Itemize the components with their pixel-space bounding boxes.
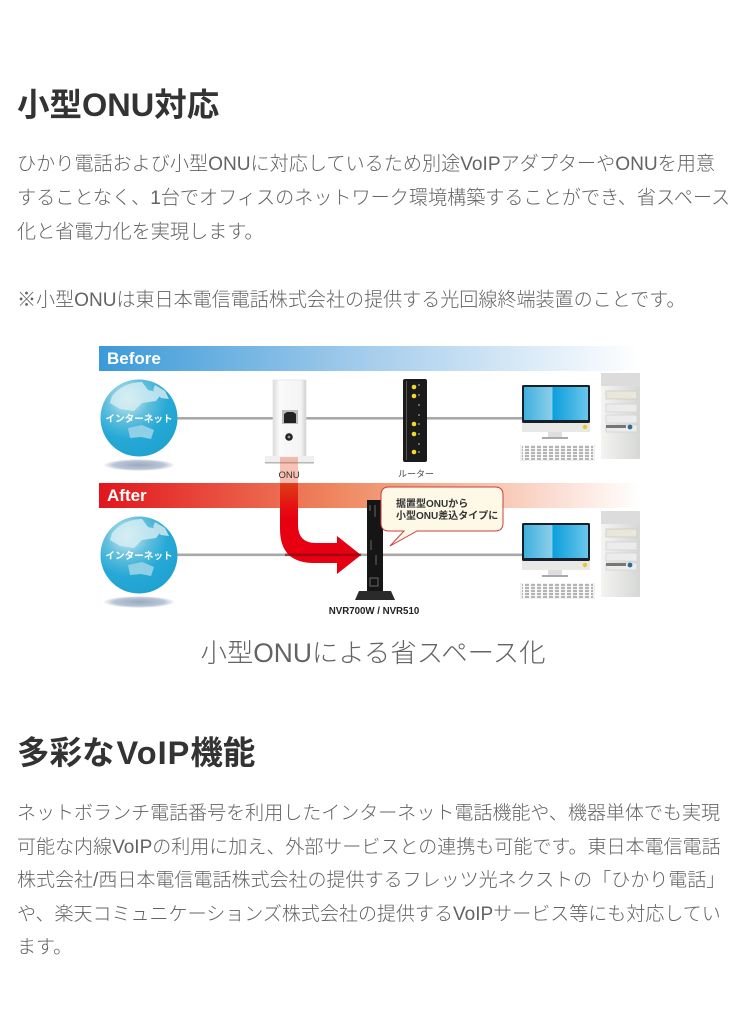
icon: desktop PC (before): [520, 373, 640, 461]
icon: internet globe (after): インターネット: [105, 550, 173, 562]
diagram: before and after network: [99, 346, 640, 617]
icon: router: [403, 379, 427, 462]
text block: small ONU description: することなく、1台でオフィスのネットワーク環境構築することができ、省スペース: [17, 188, 730, 209]
icon: NVR router: [355, 500, 395, 600]
icon: internet globe (after): [100, 516, 178, 608]
before bar: Before: [107, 349, 161, 368]
label: product name: NVR700W / NVR510: [329, 606, 419, 617]
caption: 小型ONUによる省スペース化: [200, 638, 545, 668]
icon: desktop PC (after): [520, 511, 640, 599]
text block: VoIP description: ます。: [17, 937, 72, 958]
text block: VoIP description: や、楽天コミュニケーションズ株式会社の提供するVoIPサービス等にも対応してい: [17, 904, 721, 925]
connection line: after: [170, 554, 525, 556]
text block: VoIP description: ネットボランチ電話番号を利用したインターネット電話機能や、機器単体でも実現: [17, 803, 720, 824]
after bar: After: [107, 486, 147, 505]
before bar: [99, 346, 640, 371]
text block: VoIP description: [17, 803, 725, 958]
heading: 多彩なVoIP機能: 多彩なVoIP機能: [17, 735, 255, 771]
label: router: ルーター: [398, 469, 434, 479]
after bar: [99, 483, 640, 508]
text block: small ONU description: [17, 154, 730, 243]
text block: small ONU description: 化と省電力化を実現します。: [17, 222, 264, 243]
connection line: before: [170, 417, 525, 420]
callout: 小型ONU差込タイプに: [396, 509, 498, 522]
icon: internet globe (before): [100, 380, 178, 471]
heading: 小型ONU対応: 小型ONU対応: [17, 87, 219, 123]
icon: ONU device: [265, 380, 314, 464]
text block: VoIP description: 可能な内線VoIPの利用に加え、外部サービスとの連携も可能です。東日本電信電話: [17, 837, 721, 858]
callout: [381, 487, 503, 546]
connection line seen through the arrow: [285, 554, 361, 556]
icon: internet globe (before): インターネット: [105, 413, 173, 425]
label: ONU: ONU: [278, 470, 300, 481]
text block: footnote: ※小型ONUは東日本電信電話株式会社の提供する光回線終端装置のことです。: [17, 290, 685, 311]
text block: VoIP description: 株式会社/西日本電信電話株式会社の提供するフレッツ光ネクストの「ひかり電話」: [17, 870, 725, 891]
callout: 据置型ONUから: [396, 497, 468, 510]
arrow: ONU moves into the router: [280, 457, 361, 574]
text block: small ONU description: ひかり電話および小型ONUに対応しているため別途VoIPアダプターやONUを用意: [17, 154, 715, 175]
